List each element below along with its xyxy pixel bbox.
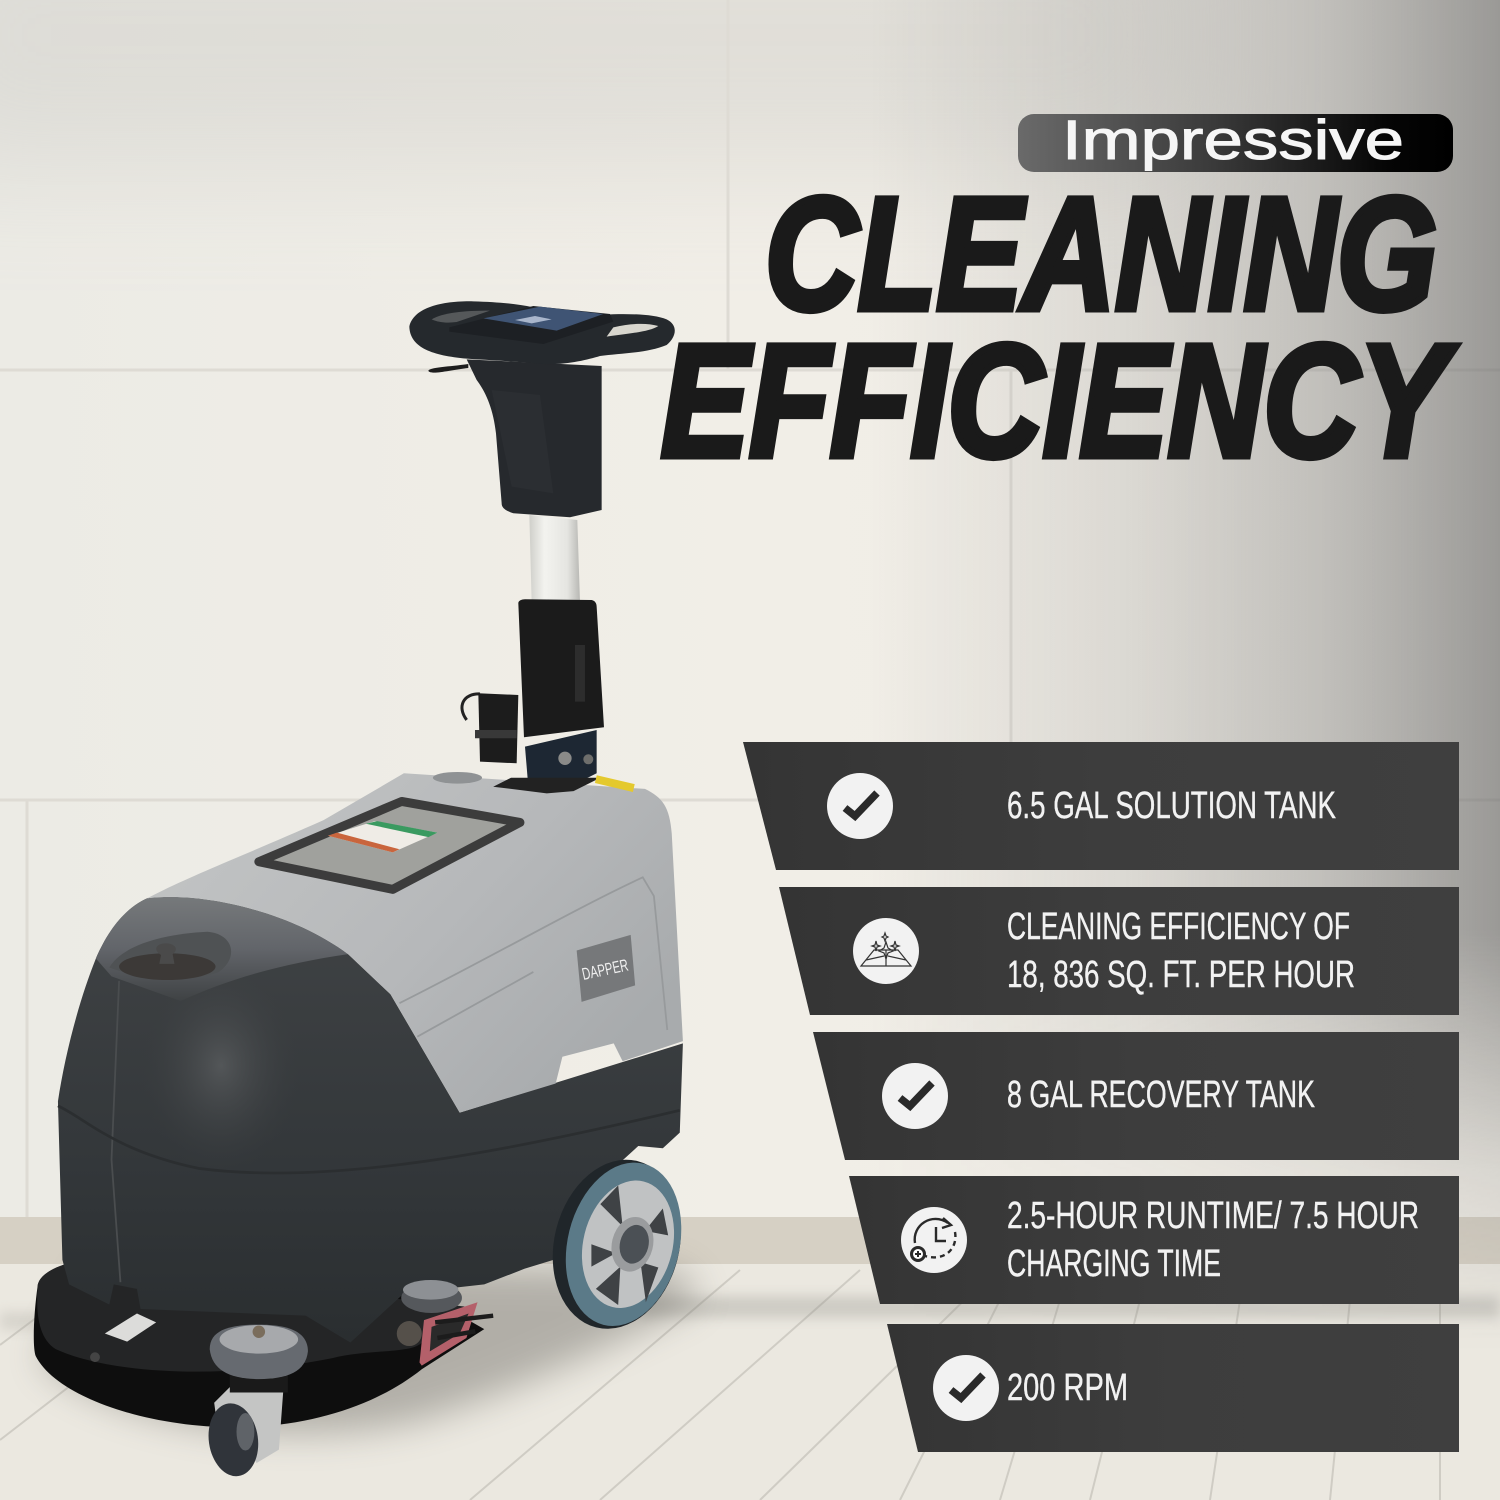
- icon: check: [827, 773, 893, 839]
- machine body: [34, 772, 698, 1479]
- squeegee mount: [397, 1280, 493, 1366]
- hinge: [525, 730, 597, 793]
- tank lid: [259, 801, 520, 889]
- base screw: [90, 1352, 100, 1362]
- feature: runtime and charging: [849, 1176, 1459, 1304]
- brand plate: DAPPER: [580, 956, 630, 984]
- hood: [96, 897, 348, 1001]
- feature text: CLEANING EFFICIENCY OF: [1007, 906, 1350, 948]
- lower sleeve: [518, 599, 604, 737]
- feature text: CHARGING TIME: [1007, 1243, 1221, 1285]
- plug: [462, 693, 518, 763]
- console: [449, 306, 613, 344]
- badge: Impressive: Impressive: [1062, 108, 1404, 171]
- handlebar inner gaps: [607, 324, 658, 337]
- icon: check: [933, 1355, 999, 1421]
- dark lower body: [58, 898, 683, 1342]
- neck: [467, 359, 602, 517]
- heading: cleaning efficiency: [661, 164, 1457, 490]
- feature: 6.5 gal solution tank: 6.5 GAL SOLUTION TANK: [1007, 785, 1336, 827]
- feature text: [1007, 906, 1355, 996]
- badge: Impressive: [1018, 108, 1453, 172]
- control screen: [483, 307, 603, 331]
- filler port: [109, 932, 231, 980]
- body speckle highlight: [141, 959, 301, 1173]
- feature: 200 RPM: [887, 1324, 1459, 1452]
- icon: sparkling floor: [853, 918, 919, 984]
- top slot and cup holder: [433, 772, 634, 793]
- rear wheel: [535, 1146, 698, 1343]
- brush base: [34, 1264, 484, 1427]
- column: [529, 515, 580, 602]
- icon: clock charge: [901, 1207, 967, 1273]
- product: floor scrubber machine: [34, 301, 698, 1479]
- front caster: [204, 1325, 308, 1479]
- feature: 200 RPM: 200 RPM: [1007, 1367, 1128, 1409]
- feature: 6.5 gal solution tank: [743, 742, 1459, 870]
- feature text: 18, 836 SQ. FT. PER HOUR: [1007, 954, 1355, 996]
- lever: [428, 364, 468, 373]
- feature: cleaning efficiency rate: [779, 887, 1459, 1015]
- handlebar: [409, 301, 675, 364]
- icon: check: [882, 1063, 948, 1129]
- base top disc: [37, 1264, 466, 1372]
- body side crease: [58, 1106, 680, 1173]
- feature text: [1007, 1195, 1419, 1285]
- neck panel: [492, 390, 553, 493]
- body seam: [112, 981, 120, 1282]
- brand plate: [577, 935, 635, 1002]
- feature: 8 gal recovery tank: 8 GAL RECOVERY TANK: [1007, 1074, 1315, 1116]
- side panel crease: [399, 877, 667, 1037]
- feature: 8 gal recovery tank: [813, 1032, 1459, 1160]
- grey top housing: [147, 773, 683, 1113]
- lid label: [328, 821, 437, 852]
- base sticker: [105, 1313, 156, 1342]
- machine handle and column: [409, 301, 675, 793]
